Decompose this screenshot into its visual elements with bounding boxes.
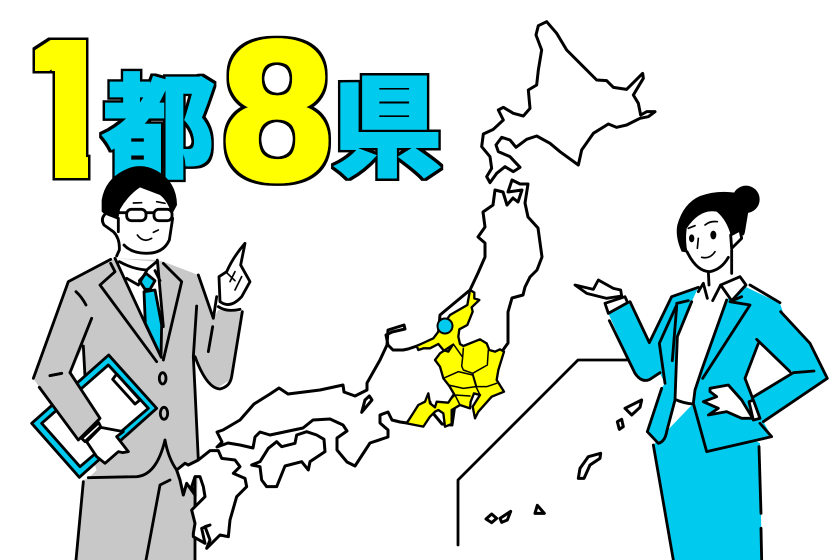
Honshu xyxy=(217,180,542,466)
Awaji xyxy=(362,396,372,412)
arm gap xyxy=(745,342,793,397)
right jacket and arm xyxy=(693,285,827,452)
blouse collar xyxy=(721,277,746,301)
open hand xyxy=(575,280,628,313)
ear and neck xyxy=(102,213,119,256)
finger lines xyxy=(227,272,242,290)
forearm lines xyxy=(39,373,100,440)
head xyxy=(677,186,760,272)
title numeral 8: 8 xyxy=(222,0,332,221)
ear xyxy=(731,230,742,248)
gap behind arm xyxy=(70,347,85,383)
left jacket and arm xyxy=(608,287,698,443)
Hokkaido xyxy=(482,22,655,183)
clipboard xyxy=(32,355,157,477)
forearm over clipboard xyxy=(39,373,100,440)
Okinawa inset frame xyxy=(458,360,627,545)
head xyxy=(102,166,177,256)
buttons xyxy=(159,373,168,419)
brows, nose and smile xyxy=(133,202,165,240)
suit lines xyxy=(33,258,242,560)
eyes xyxy=(689,231,716,242)
Kanto and Koshinetsu prefectures xyxy=(407,290,504,427)
Kyushu xyxy=(177,451,247,548)
skirt xyxy=(653,403,762,560)
brows, nose and smile xyxy=(688,221,717,258)
shirt xyxy=(115,258,163,358)
islands xyxy=(486,505,544,523)
left hand and cuff xyxy=(82,423,128,463)
title numeral 1: 1 xyxy=(7,0,121,225)
map of Japan xyxy=(177,22,655,548)
jacket lines xyxy=(609,285,827,452)
Shikoku xyxy=(252,432,325,487)
prefecture borders xyxy=(443,344,497,405)
blouse xyxy=(677,283,728,404)
woman in blue suit xyxy=(575,186,827,560)
hair and bun xyxy=(677,192,748,253)
capital marker xyxy=(438,318,452,334)
hair xyxy=(102,166,177,218)
right hand on hip xyxy=(703,385,760,420)
skirt lines xyxy=(653,445,762,560)
Okinawa islands xyxy=(578,400,642,478)
Shikoku and Kyushu xyxy=(177,396,372,548)
man in grey suit with clipboard xyxy=(32,166,250,560)
glasses xyxy=(118,209,172,221)
pointing hand xyxy=(219,243,250,305)
title: 1都8県 xyxy=(32,36,444,186)
title kanji 都: 都 xyxy=(102,66,215,192)
suit fill xyxy=(33,258,242,560)
tie xyxy=(139,273,162,357)
title kanji 県: 県 xyxy=(332,68,442,191)
yellow region xyxy=(407,290,504,427)
